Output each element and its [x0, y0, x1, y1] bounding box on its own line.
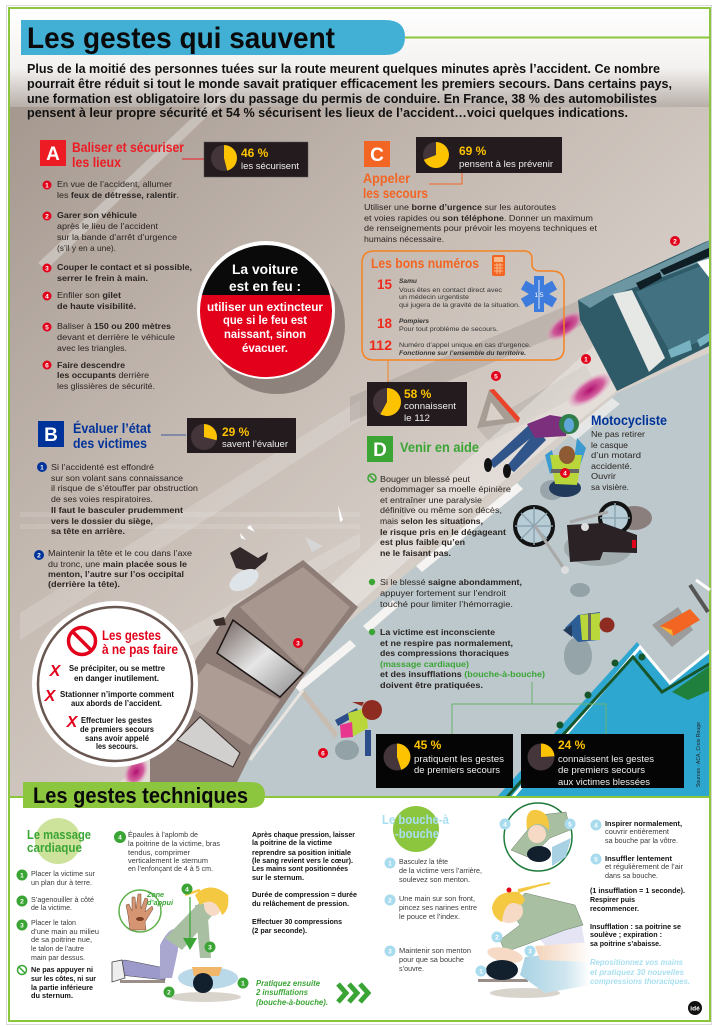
stat: 58 %: 58 %: [404, 387, 432, 401]
massage step 4: verticalement le sternum: [128, 856, 208, 865]
bouche-a-bouche steps 4 and 5: [590, 819, 683, 880]
stat: 69 %: 69 %: [459, 144, 487, 158]
section C heading: [363, 141, 428, 201]
note: pratiquez ensuite: 2 insufflations: [255, 988, 309, 997]
stat: 46 %: les sécurisent: [241, 160, 299, 171]
icon: hand, zone d'appui: d’appui: [147, 900, 174, 907]
section B steps: 2: [37, 552, 41, 560]
bouche-a-bouche steps 1 to 3: 1: [388, 860, 392, 868]
section A heading: Baliser et sécuriser: [72, 140, 185, 155]
panel: les bons numeros: 18: [377, 315, 392, 331]
section B steps: du tronc, une main placée sous le: [48, 559, 187, 569]
callout: les gestes a ne pas faire: à ne pas faire: [102, 642, 178, 657]
bouche-a-bouche notes: Respirer puis: [590, 895, 635, 904]
title bar: Les gestes qui sauvent: [27, 22, 335, 55]
section B steps: vers le dossier du siège,: [51, 516, 153, 526]
accident number markers: 6: [321, 750, 325, 758]
section D text: Bouger un blessé peut: [380, 474, 471, 484]
bouche-a-bouche steps 1 to 3: soulevez son menton.: [399, 875, 470, 884]
note: repositionnez vos mains: [590, 958, 690, 986]
heading: les gestes techniques: Les gestes techniques: [33, 783, 248, 808]
bouche-a-bouche steps 4 and 5: 5: [594, 856, 598, 864]
section D text: et ne respire pas normalement,: [380, 638, 513, 648]
sources credit: Sources : ACA, Croix Rouge: [696, 722, 702, 787]
section A steps: 3: [45, 266, 49, 272]
bouche-a-bouche steps 1 to 3: pincez ses narines entre: [399, 903, 477, 912]
note: repositionnez vos mains: et pratiquez 30 nouvelles: [590, 968, 685, 977]
section B steps: de ses voies respiratoires.: [51, 494, 153, 504]
section A steps: 6: [45, 362, 49, 370]
bouche-a-bouche notes: recommencer.: [590, 904, 639, 913]
section C text: et voies rapides ou son téléphone . Donner un maximum: [364, 213, 593, 223]
section A heading: les lieux: [72, 155, 121, 170]
note: pratiquez ensuite: [255, 979, 328, 1007]
section A steps: de haute visibilité.: [57, 301, 136, 311]
section B steps: (derrière la tête).: [48, 579, 120, 589]
bouche-a-bouche notes: Insufflation : sa poitrine se: [590, 922, 681, 931]
callout: les gestes a ne pas faire: de premiers secours: [80, 725, 155, 734]
injured motorcyclist: [484, 414, 579, 478]
illustration: mouth to mouth main: [476, 883, 592, 998]
motocycliste note: Motocycliste: [591, 413, 667, 428]
road scene background: [10, 9, 711, 797]
section D heading: Venir en aide: [400, 440, 479, 455]
panel: les bons numeros: Vous êtes en contact direct avec: [399, 287, 503, 294]
bouche-a-bouche steps 4 and 5: Inspirer normalement,: [605, 819, 682, 828]
callout: les gestes a ne pas faire: sans avoir appelé: [85, 734, 150, 743]
bouche-a-bouche steps 1 to 3: 2: [388, 898, 392, 904]
logo: ide: [688, 1001, 702, 1015]
massage cardiaque heading: Le massage: [27, 827, 91, 842]
section D text: touché pour limiter l’hémorragie.: [380, 599, 513, 609]
section D text: appuyer fortement sur l’endroit: [380, 588, 507, 598]
stat: 58 %: [367, 382, 467, 426]
icon: prohibition sign: [68, 628, 96, 654]
illustration: blue car: [578, 240, 711, 391]
section A steps: les occupants derrière: [57, 370, 149, 380]
motocycliste note: accidenté.: [591, 461, 632, 471]
massage steps 1 to 3: la partie inférieure: [31, 983, 93, 992]
massage steps 1 to 3: un plan dur à terre.: [31, 878, 92, 887]
massage steps 1 to 3: 2: [20, 898, 24, 906]
motocycliste note: sa visière.: [591, 482, 629, 492]
intro text: pensent à leur propre sécurité et 54 % sécurisent les lieux de l’accident…voici quelques indications.: [27, 105, 628, 120]
bouche-a-bouche heading: Le bouche-à: [382, 812, 450, 827]
bouche-a-bouche steps 1 to 3: Basculez la tête: [399, 857, 448, 866]
motocycliste note: Ouvrir: [591, 471, 616, 481]
section D text: et entraîner une paralysie: [380, 495, 482, 505]
section C heading: les secours: [363, 186, 428, 201]
accident number markers: 5: [494, 374, 498, 380]
helper woman with vest: [335, 700, 382, 760]
section B steps: sur son volant sans connaissance: [51, 473, 183, 483]
stat: 24 %: 24 %: [558, 738, 586, 752]
stat: 46 %: 46 %: [241, 146, 269, 160]
section C heading: Appeler: [363, 171, 411, 186]
panel: les bons numeros: Les bons numéros: [371, 256, 479, 271]
stat: 24 %: [521, 734, 684, 788]
helper walking: [563, 612, 614, 675]
stat: 69 %: pensent à les prévenir: [459, 158, 553, 169]
panel: les bons numeros: Samu: [399, 278, 417, 285]
callout: les gestes a ne pas faire: Les gestes: [102, 628, 161, 643]
section B steps: Maintenir la tête et le cou dans l’axe: [48, 548, 192, 558]
massage notes: reprendre sa position initiale: [252, 848, 351, 857]
icon: hand, zone d'appui: Zone: [146, 892, 164, 899]
callout: la voiture est en feu: [197, 241, 345, 394]
section A steps: (s’il y en a une).: [57, 243, 116, 253]
callout: la voiture est en feu: utiliser un extincteur: [207, 300, 323, 314]
bouche-a-bouche notes: sa poitrine s’abaisse.: [590, 939, 661, 948]
panel: les bons numeros: Numéro d’appel unique en cas d’urgence.: [399, 342, 531, 349]
panel: les bons numeros: Pour tout problème de secours.: [399, 326, 498, 333]
icon: green prohibition: [368, 474, 376, 482]
bouche-a-bouche steps 4 and 5: sa bouche par la vôtre.: [605, 836, 678, 845]
section B steps: [34, 462, 198, 589]
section C heading: C: [370, 145, 384, 166]
panel: les bons numeros: un médecin urgentiste: [399, 294, 469, 301]
callout: la voiture est en feu: est en feu :: [229, 278, 301, 294]
section C text: de renseignements pour prévoir les moyens techniques et: [364, 223, 598, 233]
massage step 4: [114, 830, 220, 873]
section D text: et des insufflations (bouche-à-bouche): [380, 669, 545, 679]
note: repositionnez vos mains: Repositionnez vos mains: [590, 958, 684, 967]
massage notes: (le sang revient vers le cœur).: [252, 856, 353, 865]
massage steps 1 to 3: 3: [20, 922, 24, 930]
massage steps 1 to 3: [16, 869, 99, 1000]
massage cardiaque heading: [27, 818, 91, 864]
stat: 24 %: de premiers secours: [558, 764, 645, 775]
callout: la voiture est en feu: que si le feu est: [223, 313, 307, 327]
section A heading: [40, 140, 185, 170]
intro text: [27, 61, 672, 120]
section B steps: menton, l’autre sur l’os occipital: [48, 569, 184, 579]
intro text: une formation est obligatoire lors du passage du permis de conduire. En France, 38 % des automobilistes: [27, 91, 657, 106]
helper in yellow vest: 4: [563, 470, 567, 478]
connector lines to stats: [452, 682, 606, 735]
section D text: (massage cardiaque): [380, 659, 469, 669]
bouche-a-bouche steps 1 to 3: [384, 857, 482, 973]
section A steps: Faire descendre: [57, 360, 125, 370]
callout: la voiture est en feu: naissant, sinon: [224, 327, 306, 341]
section A steps: En vue de l’accident, allumer: [57, 179, 172, 189]
bouche-a-bouche steps 1 to 3: Maintenir son menton: [399, 946, 471, 955]
stat: 45 %: pratiquent les gestes: [414, 753, 504, 764]
bouche-a-bouche steps 4 and 5: dans sa bouche.: [605, 871, 658, 880]
bouche-a-bouche steps 1 to 3: le pouce et l’index.: [399, 912, 460, 921]
bouche-a-bouche steps 1 to 3: s’ouvre.: [399, 964, 424, 973]
callout: les gestes a ne pas faire: Effectuer les gestes: [81, 716, 153, 725]
massage notes: [252, 830, 357, 935]
accident number markers: 2: [673, 238, 677, 246]
bouche-a-bouche notes: [590, 886, 685, 948]
section A steps: avec les triangles.: [57, 343, 127, 353]
panel: les bons numeros: 15: [377, 276, 392, 292]
bouche-a-bouche steps 4 and 5: et régulièrement de l’air: [605, 862, 683, 871]
bottom panel background: [10, 797, 710, 1020]
section A heading: A: [46, 144, 60, 165]
massage steps 1 to 3: de sa poitrine nue,: [31, 935, 92, 944]
accident number markers: 1: [584, 356, 588, 364]
massage cardiaque heading: cardiaque: [27, 840, 82, 855]
note: repositionnez vos mains: compressions thoraciques.: [590, 977, 690, 986]
icon: green chevrons: [338, 984, 368, 1002]
illustration: cardiac massage: 1: [241, 980, 245, 988]
section A steps: 4: [45, 294, 49, 300]
stat: 69 %: [416, 137, 562, 184]
section A steps: [42, 179, 192, 391]
massage steps 1 to 3: Placer le talon: [31, 918, 76, 927]
stat: 45 %: [376, 734, 513, 788]
bouche-a-bouche steps 4 and 5: 4: [594, 822, 598, 830]
section D text: mais selon les situations,: [380, 516, 483, 526]
massage step 4: tendus, comprimer: [128, 848, 190, 857]
section A steps: sur la bande d’arrêt d’urgence: [57, 232, 177, 242]
callout: la voiture est en feu: évacuer.: [242, 341, 288, 355]
illustration: mouth to mouth detail circle: [500, 803, 576, 871]
bouche-a-bouche heading: [382, 806, 450, 852]
callout: les gestes a ne pas faire: les secours.: [96, 742, 138, 751]
section A steps: Enfiler son gilet: [57, 290, 121, 300]
section A steps: 1: [45, 182, 49, 190]
massage notes: du relâchement de pression.: [252, 899, 349, 908]
illustration: mouth to mouth detail circle: 4: [503, 822, 507, 828]
section D heading: [367, 436, 479, 462]
illustration: cardiac massage: [112, 884, 248, 1002]
intro text: Plus de la moitié des personnes tuées sur la route meurent quelques minutes après l’accident. Ce nombre: [27, 61, 660, 76]
massage notes: Après chaque pression, laisser: [252, 830, 355, 839]
section A steps: 5: [45, 324, 49, 332]
bouche-a-bouche heading: -bouche: [395, 826, 439, 841]
panel: les bons numeros: [362, 251, 564, 382]
section D text: définitive ou même son décès,: [380, 505, 502, 515]
bouche-a-bouche steps 1 to 3: pour que sa bouche: [399, 955, 464, 964]
section D text: doivent être pratiquées.: [380, 680, 483, 690]
stat: 29 %: savent l’évaluer: [222, 438, 288, 449]
illustration: cardiac massage: 3: [208, 944, 212, 952]
illustration: cardiac massage: 2: [167, 990, 171, 996]
icon: phone: [492, 255, 505, 276]
massage notes: sur le sternum.: [252, 873, 304, 882]
stat: 58 %: connaissent: [404, 400, 456, 411]
section D text: le risque pris en le dégageant: [380, 527, 506, 537]
section B heading: B: [44, 425, 58, 446]
title bar: [21, 20, 710, 55]
icon: hand, zone d'appui: [119, 890, 174, 932]
section C text: Utiliser une borne d’urgence sur les autoroutes: [364, 202, 556, 212]
callout: les gestes a ne pas faire: en danger inutilement.: [74, 674, 159, 683]
bouche-a-bouche notes: soulève ; expiration :: [590, 930, 662, 939]
stat: 46 %: [182, 142, 308, 177]
callout: les gestes a ne pas faire: aux abords de l’accident.: [71, 699, 162, 708]
icon: star of life: 1 5: [534, 292, 544, 299]
bouche-a-bouche steps 1 to 3: de la victime vers l’arrière,: [399, 866, 482, 875]
section D text: La victime est inconsciente: [380, 627, 495, 637]
skid marks of blue car: [541, 305, 618, 414]
stat: 24 %: aux victimes blessées: [558, 776, 650, 787]
section D text: [368, 474, 545, 690]
section D text: ne le faisant pas.: [380, 548, 451, 558]
section A steps: Baliser à 150 ou 200 mètres: [57, 321, 171, 331]
stat: 45 %: 45 %: [414, 738, 442, 752]
section A steps: serrer le frein à main.: [57, 273, 148, 283]
stat: 24 %: connaissent les gestes: [558, 753, 654, 764]
bouche-a-bouche steps 4 and 5: couvrir entièrement: [605, 827, 670, 836]
stat: 29 %: 29 %: [222, 425, 250, 439]
massage steps 1 to 3: de la victime.: [31, 903, 72, 912]
illustration: cardiac massage: 4: [185, 886, 189, 894]
logo: ide: idé: [690, 1006, 700, 1012]
massage notes: Effectuer 30 compressions: [252, 917, 342, 926]
section A steps: les feux de détresse, ralentir .: [57, 190, 179, 200]
massage notes: Durée de compression = durée: [252, 890, 357, 899]
callout: les gestes a ne pas faire: Se précipiter, ou se mettre: [69, 664, 166, 673]
section B steps: Il faut le basculer prudemment: [51, 505, 183, 515]
section D text: des compressions thoraciques: [380, 648, 509, 658]
section A steps: Garer son véhicule: [57, 210, 137, 220]
section B steps: Si l’accidenté est effondré: [51, 462, 154, 472]
massage steps 1 to 3: du sternum.: [31, 991, 73, 1000]
illustration: crashed tan car: [150, 505, 358, 790]
bouche-a-bouche steps 1 to 3: 3: [388, 948, 392, 956]
massage step 4: 4: [118, 834, 122, 842]
accident number markers: [293, 236, 680, 758]
massage step 4: Épaules à l’aplomb de: [128, 830, 198, 839]
massage step 4: en l’enfonçant de 4 à 5 cm.: [128, 864, 213, 873]
section D text: Si le blessé saigne abondamment,: [380, 577, 522, 587]
icon: prohibition: [18, 966, 26, 974]
motocycliste note: le casque: [591, 440, 628, 450]
massage step 4: la poitrine de la victime, bras: [128, 839, 220, 848]
helper in yellow vest: [540, 438, 586, 500]
skid mark left: [118, 753, 154, 791]
massage steps 1 to 3: le talon de l’autre: [31, 944, 84, 953]
icon: star of life: [521, 276, 557, 312]
bouche-a-bouche steps 1 to 3: Une main sur son front,: [399, 894, 475, 903]
section D text: est plus faible qu’en: [380, 537, 465, 547]
warning triangle: [477, 389, 520, 428]
massage steps 1 to 3: d’une main au milieu: [31, 927, 99, 936]
note: pratiquez ensuite: (bouche-à-bouche).: [256, 998, 328, 1007]
panel: les bons numeros: Pompiers: [399, 318, 429, 325]
illustration: mouth to mouth main: 2: [495, 934, 499, 942]
stat: 58 %: le 112: [404, 412, 430, 423]
blue field and fence, bottom right: [497, 642, 711, 797]
stat: 45 %: de premiers secours: [414, 764, 500, 775]
section B heading: [38, 421, 151, 451]
section B steps: il risque de s’étouffer par obstruction: [51, 483, 198, 493]
illustration: mouth to mouth detail circle: 5: [568, 822, 572, 828]
intro text: pourrait être réduit si tout le monde savait pratiquer efficacement les premiers secours. Dans certains pays,: [27, 76, 672, 91]
massage notes: la poitrine de la victime: [252, 838, 332, 847]
panel: les bons numeros: qui jugera de la gravité de la situation.: [399, 302, 520, 309]
motocycliste note: d’un motard: [591, 450, 641, 460]
massage steps 1 to 3: S’agenouiller à côté: [31, 895, 94, 904]
massage steps 1 to 3: Ne pas appuyer ni: [31, 965, 93, 974]
section B heading: des victimes: [73, 436, 147, 451]
section A steps: après le lieu de l’accident: [57, 221, 159, 231]
section C text: [364, 202, 598, 244]
section B steps: 1: [40, 464, 44, 472]
callout: les gestes a ne pas faire: X: [66, 714, 79, 731]
motocycliste note: [591, 413, 667, 492]
motocycliste note: Ne pas retirer: [591, 429, 645, 439]
bouche-a-bouche steps 4 and 5: Insuffler lentement: [605, 854, 672, 863]
bouche-a-bouche notes: (1 insufflation = 1 seconde).: [590, 886, 685, 895]
section B heading: Évaluer l’état: [73, 421, 151, 436]
illustration: mouth to mouth main: 1: [479, 968, 483, 976]
section A steps: devant et derrière le véhicule: [57, 332, 175, 342]
panel: les bons numeros: 112: [369, 337, 392, 353]
massage steps 1 to 3: 1: [20, 872, 24, 880]
massage notes: (2 par seconde).: [252, 926, 307, 935]
section A steps: 2: [45, 214, 49, 220]
massage steps 1 to 3: sur les côtes, ni sur: [31, 974, 96, 983]
callout: les gestes a ne pas faire: X: [44, 688, 57, 705]
section A steps: les glissières de sécurité.: [57, 381, 155, 391]
callout: les gestes a ne pas faire: [32, 601, 198, 767]
section C text: humains nécessaire.: [364, 234, 444, 244]
section B steps: sa tête en arrière.: [51, 526, 125, 536]
callout: la voiture est en feu: La voiture: [232, 261, 298, 277]
massage notes: Les mains sont positionnées: [252, 864, 348, 873]
callout: les gestes a ne pas faire: X: [49, 663, 62, 680]
accident number markers: 3: [296, 640, 300, 648]
note: pratiquez ensuite: Pratiquez ensuite: [256, 979, 321, 988]
stat: 29 %: [161, 418, 296, 453]
section A steps: Couper le contact et si possible,: [57, 262, 192, 272]
section D text: endommager sa moelle épinière: [380, 484, 511, 494]
motorcycle: [515, 503, 652, 597]
camper box scenery: [652, 580, 710, 647]
section D heading: D: [373, 440, 387, 461]
callout: les gestes a ne pas faire: Stationner n’importe comment: [60, 690, 174, 699]
massage steps 1 to 3: main par dessus.: [31, 953, 85, 962]
massage steps 1 to 3: Placer la victime sur: [31, 869, 95, 878]
panel: les bons numeros: Fonctionne sur l’ensemble du territoire.: [399, 350, 526, 357]
illustration: mouth to mouth main: 3: [528, 948, 532, 956]
